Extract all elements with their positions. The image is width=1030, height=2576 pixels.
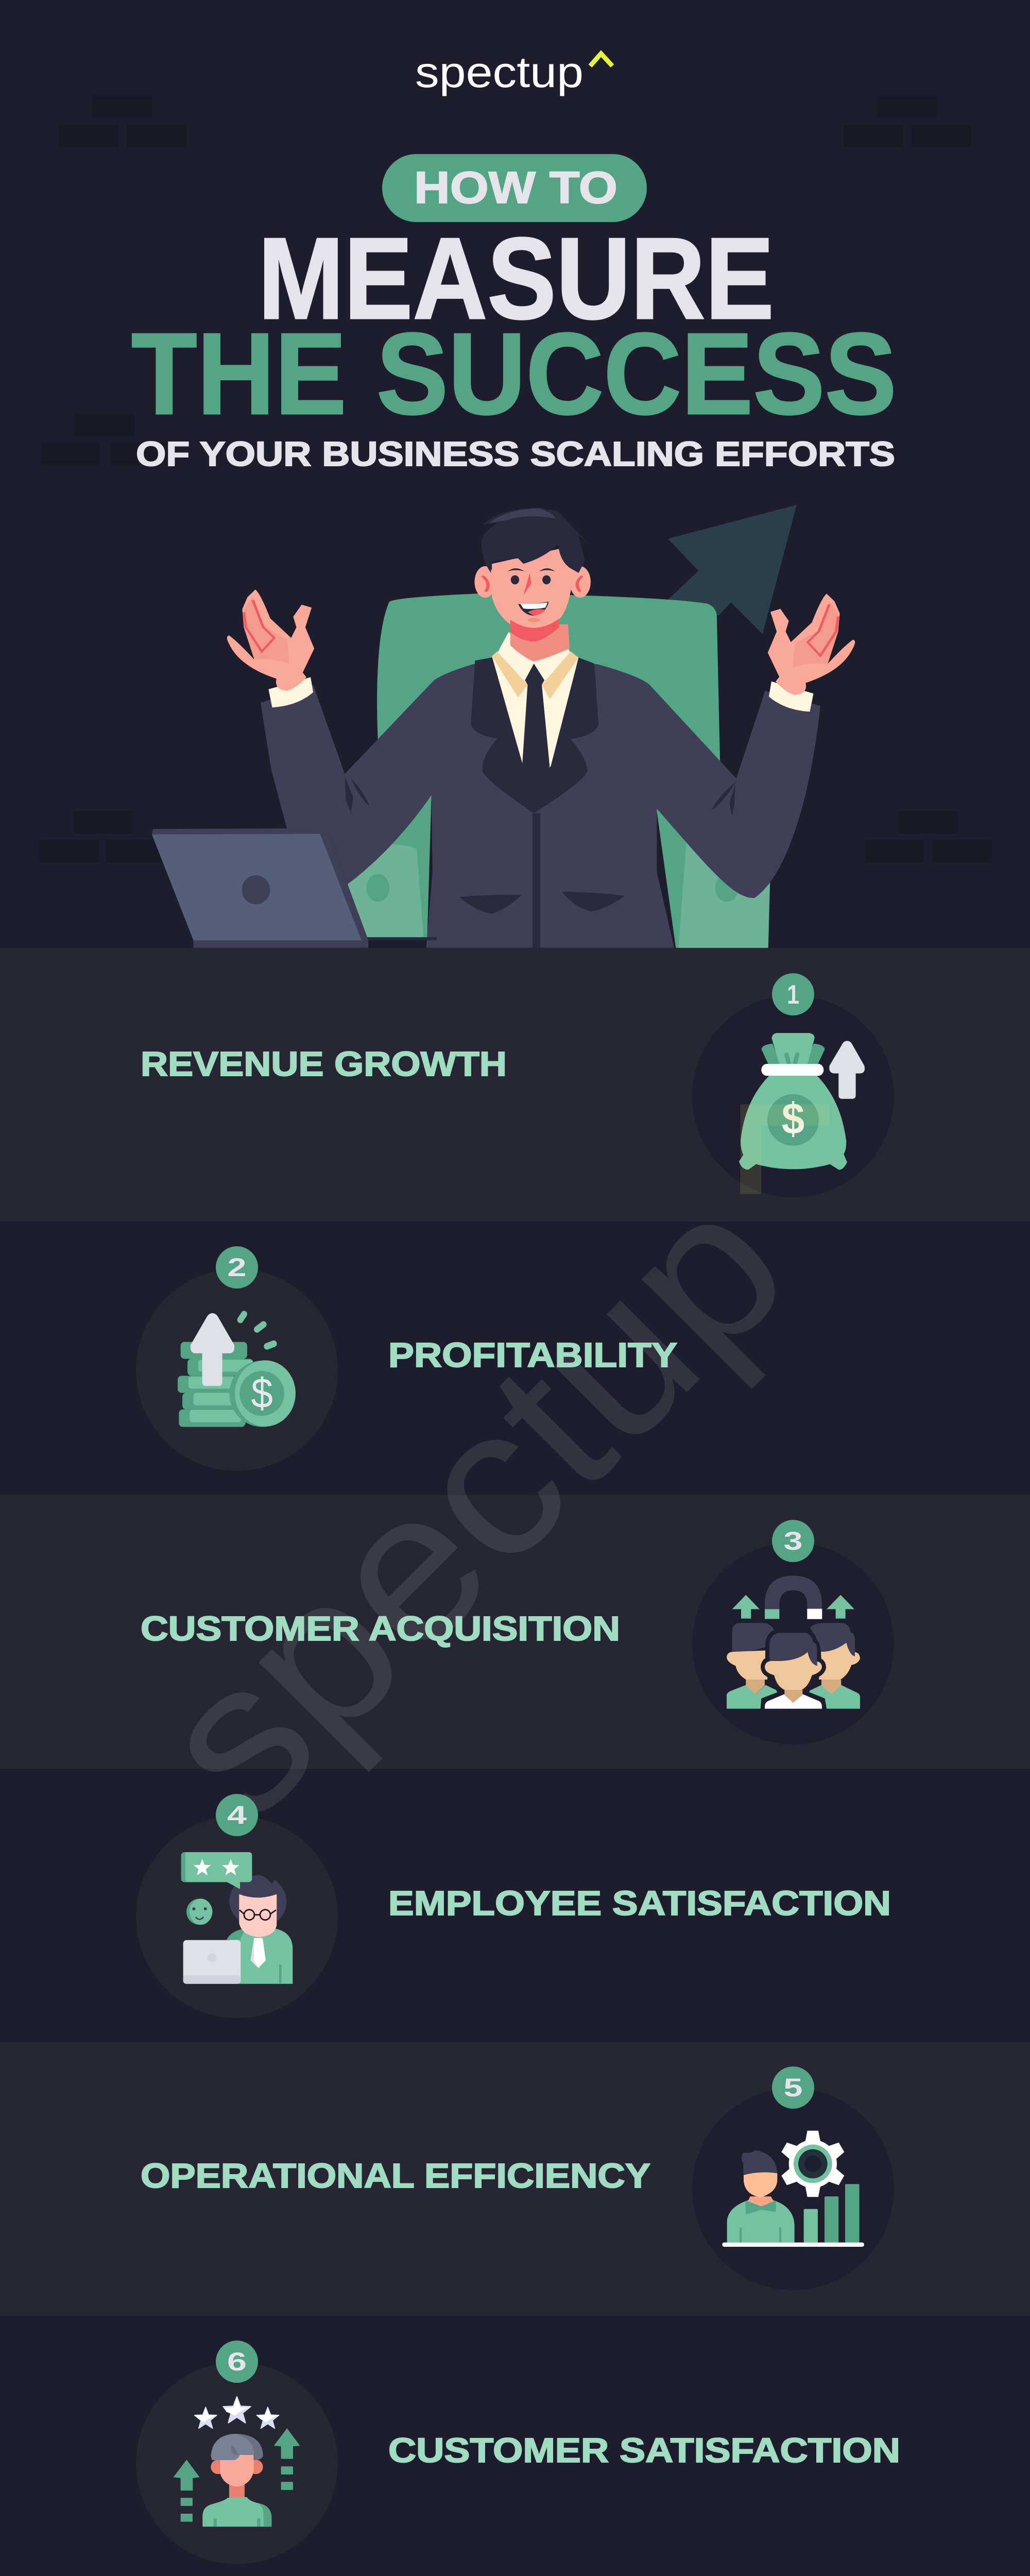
- panel 5: operational efficiency: [141, 2066, 894, 2290]
- subtitle: OF YOUR BUSINESS SCALING EFFORTS: [136, 435, 895, 473]
- title: measure: MEASURE: [258, 213, 774, 343]
- title: how to pill: HOW TO: [414, 163, 617, 213]
- panel 1: revenue growth: [141, 973, 894, 1197]
- icon backdrop circle 1: [692, 995, 894, 1197]
- icon: operator, gear and bars: [722, 2131, 864, 2247]
- watermark: spectup: spectup: [114, 1146, 830, 1863]
- icon: employee with rating: [181, 1852, 293, 1984]
- icon backdrop circle 2: [136, 1269, 338, 1471]
- heading: employee satisfaction: EMPLOYEE SATISFACTION: [388, 1884, 891, 1923]
- number badge 6: 6: [227, 2347, 247, 2376]
- heading: profitability: PROFITABILITY: [388, 1336, 677, 1375]
- number badge 4: [216, 1794, 258, 1836]
- icon backdrop circle 3: [692, 1543, 894, 1744]
- number badge 3: [772, 1520, 814, 1562]
- title: the success: THE SUCCESS: [131, 309, 897, 438]
- heading: revenue growth: REVENUE GROWTH: [141, 1045, 507, 1083]
- logo: spectup: spectup: [415, 48, 583, 96]
- icon: coin stack with arrow: [178, 1313, 296, 1427]
- hero illustration: businessman in chair: [152, 505, 855, 948]
- panel 4: employee satisfaction: [136, 1794, 891, 2018]
- background bricks: [39, 95, 992, 862]
- heading: customer satisfaction: CUSTOMER SATISFACTION: [388, 2431, 900, 2470]
- heading: operational efficiency: OPERATIONAL EFFICIENCY: [141, 2157, 650, 2195]
- number badge 5: [772, 2066, 814, 2109]
- icon: magnet attracting customers: [727, 1575, 860, 1709]
- icon: money bag with arrow: [739, 1033, 865, 1194]
- icon: coin stack with arrow: $: [251, 1369, 273, 1417]
- title: how to pill: [382, 154, 647, 222]
- panel backgrounds: alternating rows: [0, 948, 1030, 2576]
- icon backdrop circle 5: [692, 2088, 894, 2290]
- number badge 1: [772, 973, 814, 1015]
- panel 3: customer acquisition: [141, 1520, 894, 1744]
- number badge 5: 5: [784, 2073, 802, 2102]
- icon: money bag with arrow: $: [782, 1094, 804, 1143]
- panel 2: profitability: [136, 1246, 677, 1471]
- number badge 2: [216, 1246, 258, 1289]
- heading: customer acquisition: CUSTOMER ACQUISITION: [141, 1609, 620, 1648]
- number badge 3: 3: [784, 1527, 802, 1555]
- icon backdrop circle 6: [136, 2362, 338, 2564]
- number badge 2: 2: [228, 1253, 246, 1282]
- number badge 1: 1: [787, 980, 799, 1010]
- icon backdrop circle 4: [136, 1816, 338, 2018]
- number badge 6: [216, 2341, 258, 2383]
- number badge 4: 4: [227, 1801, 247, 1829]
- panel 6: customer satisfaction: [136, 2341, 900, 2564]
- icon: customer with stars and arrows: [174, 2397, 300, 2527]
